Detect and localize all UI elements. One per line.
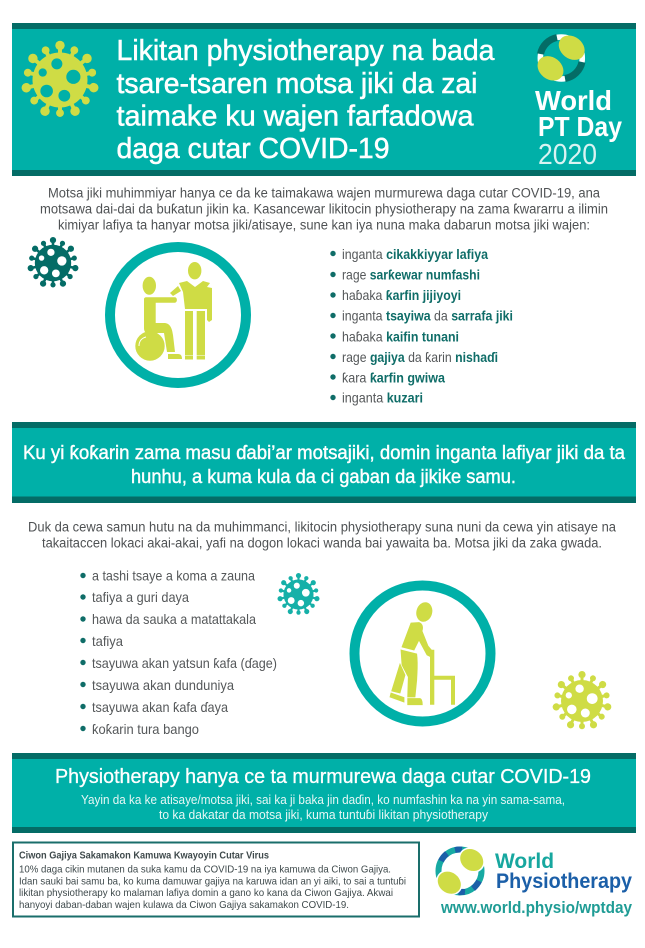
World Physiotherapy logo: Physiotherapy xyxy=(496,870,632,893)
symptoms list xyxy=(80,568,277,737)
callout: post-viral fatigue: 10% daga cikin mutanen da suka kamu da COVID-19 na iya kamuwa da Ciwon Gajiya. xyxy=(19,864,391,876)
World Physiotherapy logo: World xyxy=(495,850,554,873)
intro paragraph: motsawa dai-dai da buƙatun jikin ka. Kasancewar likitocin physiotherapy na zama ƙwararru a ilimin xyxy=(40,202,608,216)
second paragraph: Duk da cewa samun hutu na da muhimmanci, likitocin physiotherapy suna nuni da cewa yin atisaye na xyxy=(28,520,616,534)
banner: keep exercising message xyxy=(12,422,636,503)
icon: lime virus lower xyxy=(552,671,612,730)
World PT Day logo: 2020 xyxy=(538,139,597,171)
banner: keep exercising message: Ku yi ƙoƙarin zama masu ɗabi’ar motsajiki, domin inganta lafiyar jiki da ta xyxy=(23,443,625,464)
banner: keep exercising message: hunhu, a kuma kula da ci gaban da jikike samu. xyxy=(131,467,516,488)
benefits list xyxy=(330,246,513,406)
callout: post-viral fatigue: likitan physiotherapy ko malaman lafiya domin a gano ko kana da Ciwon Gajiya. Akwai xyxy=(19,887,393,899)
symptoms list: a tashi tsaye a koma a zauna xyxy=(92,568,255,584)
banner: physiotherapy and recovery: Yayin da ka ke atisaye/motsa jiki, sai ka ji baka jin daɗin, ko numfashin ka na yin sama-sama, xyxy=(81,792,565,807)
title: tsare-tsaren motsa jiki da zai xyxy=(116,68,478,100)
intro paragraph: Motsa jiki muhimmiyar hanya ce da ke taimakawa wajen murmurewa daga cutar COVID-19, ana xyxy=(48,186,600,200)
banner: physiotherapy and recovery: to ka dakatar da motsa jiki, kuma tuntuɓi likitan physiotherapy xyxy=(159,807,488,822)
World PT Day logo: World xyxy=(535,85,612,116)
symptoms list: tsayuwa akan yatsun ƙafa (ɗage) xyxy=(92,655,277,671)
icon: dark virus xyxy=(27,237,79,288)
title: daga cutar COVID-19 xyxy=(116,133,390,165)
second paragraph xyxy=(28,520,616,550)
benefits list: ƙara ƙarfin gwiwa xyxy=(342,370,445,386)
title: taimake ku wajen farfadowa xyxy=(116,100,474,132)
intro paragraph: kimiyar lafiya ta hanyar motsa jiki/atisaye, sune kan iya nuna maka dabarun motsa jiki wajen: xyxy=(58,218,590,232)
benefits list: haɓaka ƙarfin jijiyoyi xyxy=(342,287,461,303)
benefits list: haɓaka kaifin tunani xyxy=(342,328,459,344)
banner: physiotherapy and recovery xyxy=(12,753,636,833)
symptoms list: tsayuwa akan dunduniya xyxy=(92,677,234,693)
World Physiotherapy logo: www.world.physio/wptday xyxy=(440,899,633,917)
callout: post-viral fatigue xyxy=(13,842,419,916)
intro paragraph xyxy=(40,186,608,232)
symptoms list: ƙoƙarin tura bango xyxy=(92,721,199,737)
benefits list: inganta tsayiwa da sarrafa jiki xyxy=(342,308,513,324)
symptoms list: tafiya xyxy=(92,633,123,649)
callout: post-viral fatigue: Ciwon Gajiya Sakamakon Kamuwa Kwayoyin Cutar Virus xyxy=(19,850,269,862)
second paragraph: takaitaccen lokaci akai-akai, yafi na dogon lokaci wanda bai yawaita ba. Motsa jiki da zaka gwada. xyxy=(42,536,602,550)
callout: post-viral fatigue: hanyoyi daban-daban wajen kulawa da Ciwon Gajiya sakamakon COVID-19. xyxy=(19,899,349,911)
symptoms list: tafiya a guri daya xyxy=(92,589,189,605)
icon: elderly person with chair in circle xyxy=(354,586,490,722)
icon: lime virus xyxy=(21,41,99,117)
icon: teal virus xyxy=(277,573,320,615)
benefits list: inganta kuzari xyxy=(342,390,423,406)
title xyxy=(116,35,495,165)
header panel xyxy=(12,23,636,176)
World PT Day logo xyxy=(533,30,622,171)
benefits list: rage gajiya da ƙarin nishaɗi xyxy=(342,349,498,365)
banner: physiotherapy and recovery: Physiotherapy hanya ce ta murmurewa daga cutar COVID-19 xyxy=(55,766,591,788)
World PT Day logo: PT Day xyxy=(538,111,622,142)
title: Likitan physiotherapy na bada xyxy=(116,35,495,67)
benefits list: rage sarƙewar numfashi xyxy=(342,266,480,282)
benefits list: inganta cikakkiyyar lafiya xyxy=(342,246,488,262)
World Physiotherapy logo xyxy=(432,843,633,917)
icon: therapist with patient in circle xyxy=(110,247,246,383)
symptoms list: hawa da sauka a matattakala xyxy=(92,611,256,627)
symptoms list: tsayuwa akan ƙafa ɗaya xyxy=(92,699,228,715)
callout: post-viral fatigue: Idan sauki bai samu ba, ko kuma damuwar gajiya na karuwa idan an yi aiki, to sai a tuntuɓi xyxy=(19,876,406,888)
